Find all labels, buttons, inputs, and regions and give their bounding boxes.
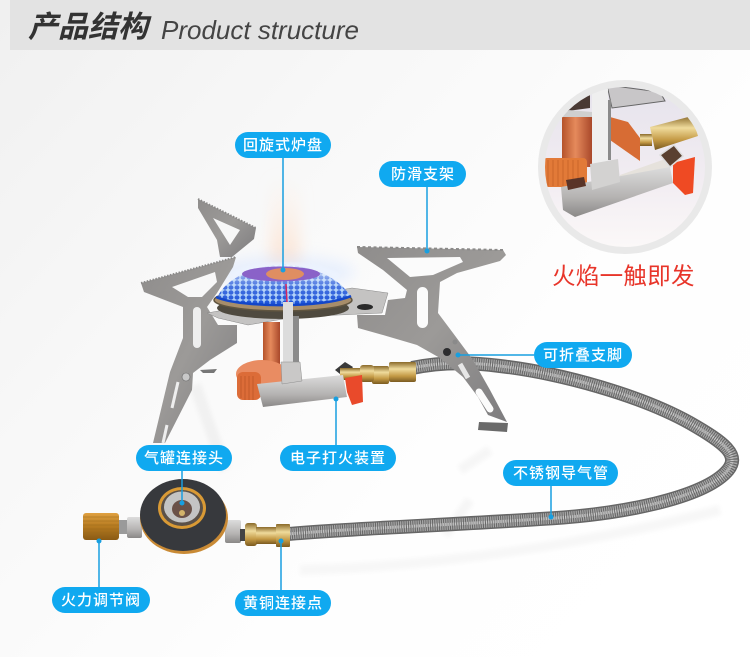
gas canister connector and valve (83, 479, 290, 554)
title: 产品结构 (28, 11, 152, 44)
callout: electronic igniter (280, 396, 396, 471)
valve knob (83, 513, 129, 540)
callout: burner: 回旋式炉盘 (243, 136, 323, 154)
callout: canister connector (136, 445, 232, 506)
callout: folding legs: 可折叠支脚 (543, 347, 623, 364)
side connectors (127, 517, 142, 538)
brass gas fitting (335, 362, 416, 384)
inset: igniter close-up (538, 80, 712, 254)
callout: electronic igniter: 电子打火装置 (290, 450, 386, 467)
callout: brass connection (235, 538, 331, 616)
front-left support and leg (141, 257, 237, 443)
callout: steel hose: 不锈钢导气管 (513, 464, 609, 482)
electronic igniter (236, 360, 363, 407)
callout: steel hose (503, 460, 618, 520)
callout: flame valve: 火力调节阀 (61, 592, 141, 609)
stove (141, 199, 508, 443)
callout: brass connection: 黄铜连接点 (243, 595, 323, 612)
copper column (263, 322, 280, 374)
red button (345, 375, 363, 405)
callout: flame valve (52, 538, 150, 613)
right support and leg (357, 247, 508, 432)
callout: canister connector: 气罐连接头 (144, 450, 224, 467)
callout: folding legs (456, 342, 632, 368)
header bar (10, 0, 750, 50)
burner head with flames (214, 264, 352, 311)
connector disc (140, 479, 228, 554)
brass connection point (240, 523, 290, 547)
inset caption: 火焰一触即发 (552, 263, 695, 289)
subtitle: Product structure (161, 15, 359, 45)
flame glow (215, 175, 355, 288)
callout: anti-slip support: 防滑支架 (391, 166, 455, 183)
back-left pot support (198, 199, 256, 257)
stainless steel gas hose (288, 363, 732, 534)
callout: anti-slip support (379, 161, 466, 254)
callout: burner (235, 132, 331, 272)
igniter rod (283, 302, 299, 368)
burner plate (207, 288, 388, 325)
